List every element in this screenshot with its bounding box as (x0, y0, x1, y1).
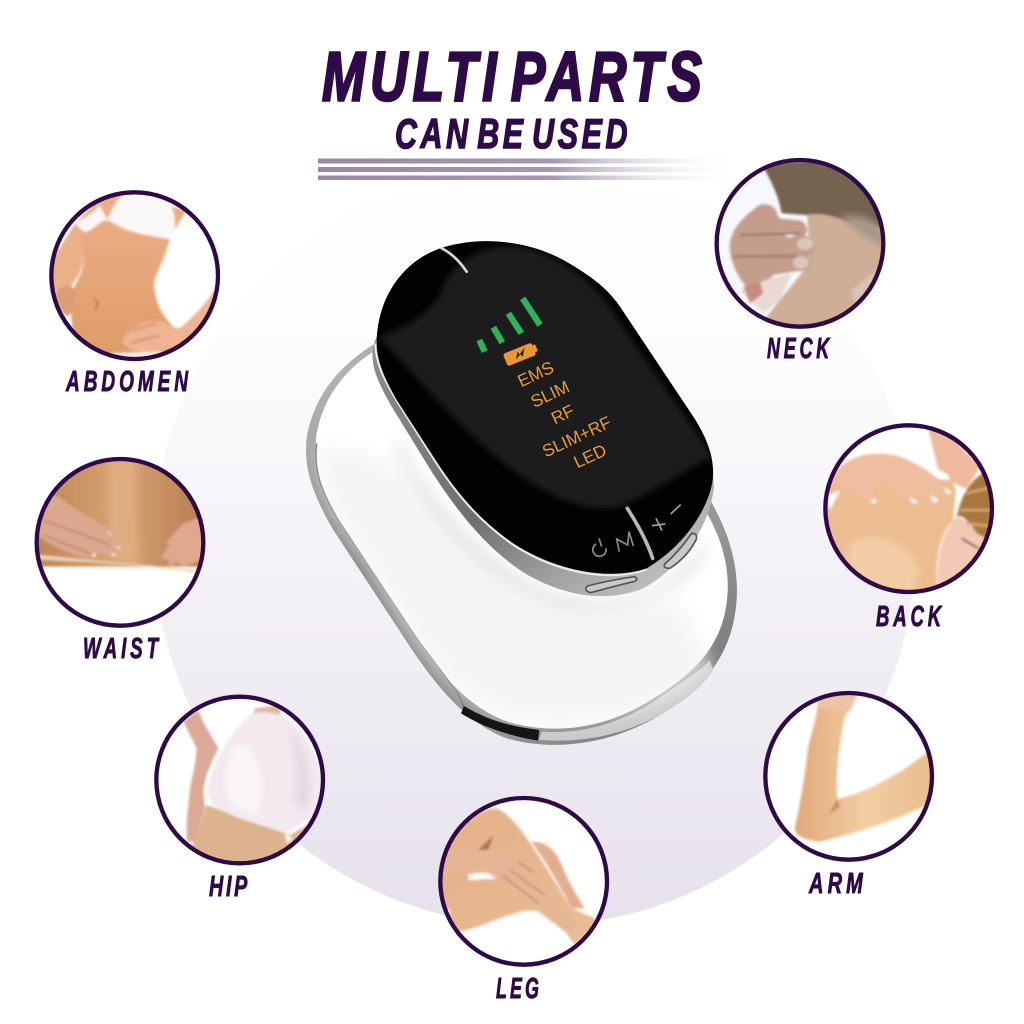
shadow under top unit (393, 437, 713, 610)
background circle (154, 164, 916, 926)
label: waist: WAIST (83, 633, 162, 665)
heading: multi parts: MULTI PARTS (322, 38, 707, 116)
signal level bars (479, 298, 540, 352)
ring (825, 425, 992, 592)
ring (156, 697, 323, 863)
product device (306, 230, 737, 745)
title (322, 38, 707, 157)
photo: waist (34, 456, 206, 628)
title underline stripes (318, 158, 743, 180)
ring (440, 798, 607, 965)
top highlight mark (442, 248, 467, 272)
ring (51, 192, 218, 359)
subheading: can be used: CAN BE USED (395, 110, 631, 157)
side buttons (586, 533, 697, 593)
photo: hip (154, 694, 326, 866)
top unit metal rim (373, 337, 714, 596)
mode labels: EMS (514, 357, 557, 391)
photo: leg (438, 796, 610, 967)
mode labels: RF (548, 400, 577, 428)
photo: neck (714, 158, 886, 329)
label: back: BACK (876, 601, 945, 633)
silver divider (627, 508, 653, 558)
black accent on base edge (461, 706, 539, 741)
mode labels: LED (570, 440, 610, 472)
device base (306, 343, 737, 745)
battery icon (503, 341, 539, 366)
label: neck: NECK (767, 333, 833, 365)
ring (37, 459, 203, 626)
label: abdomen: ABDOMEN (65, 366, 192, 398)
photo: abdomen (49, 190, 220, 362)
label: hip: HIP (209, 871, 250, 903)
mode labels: SLIM+RF (539, 412, 614, 461)
label: arm: ARM (808, 868, 867, 900)
photo: back (823, 423, 994, 594)
mode labels (514, 357, 614, 472)
ring (717, 160, 883, 327)
mode labels: SLIM (527, 376, 573, 412)
ring (765, 693, 932, 860)
label: leg: LEG (496, 973, 542, 1005)
photo: arm (763, 690, 934, 862)
top unit black face (376, 241, 714, 574)
control symbols (593, 505, 681, 556)
